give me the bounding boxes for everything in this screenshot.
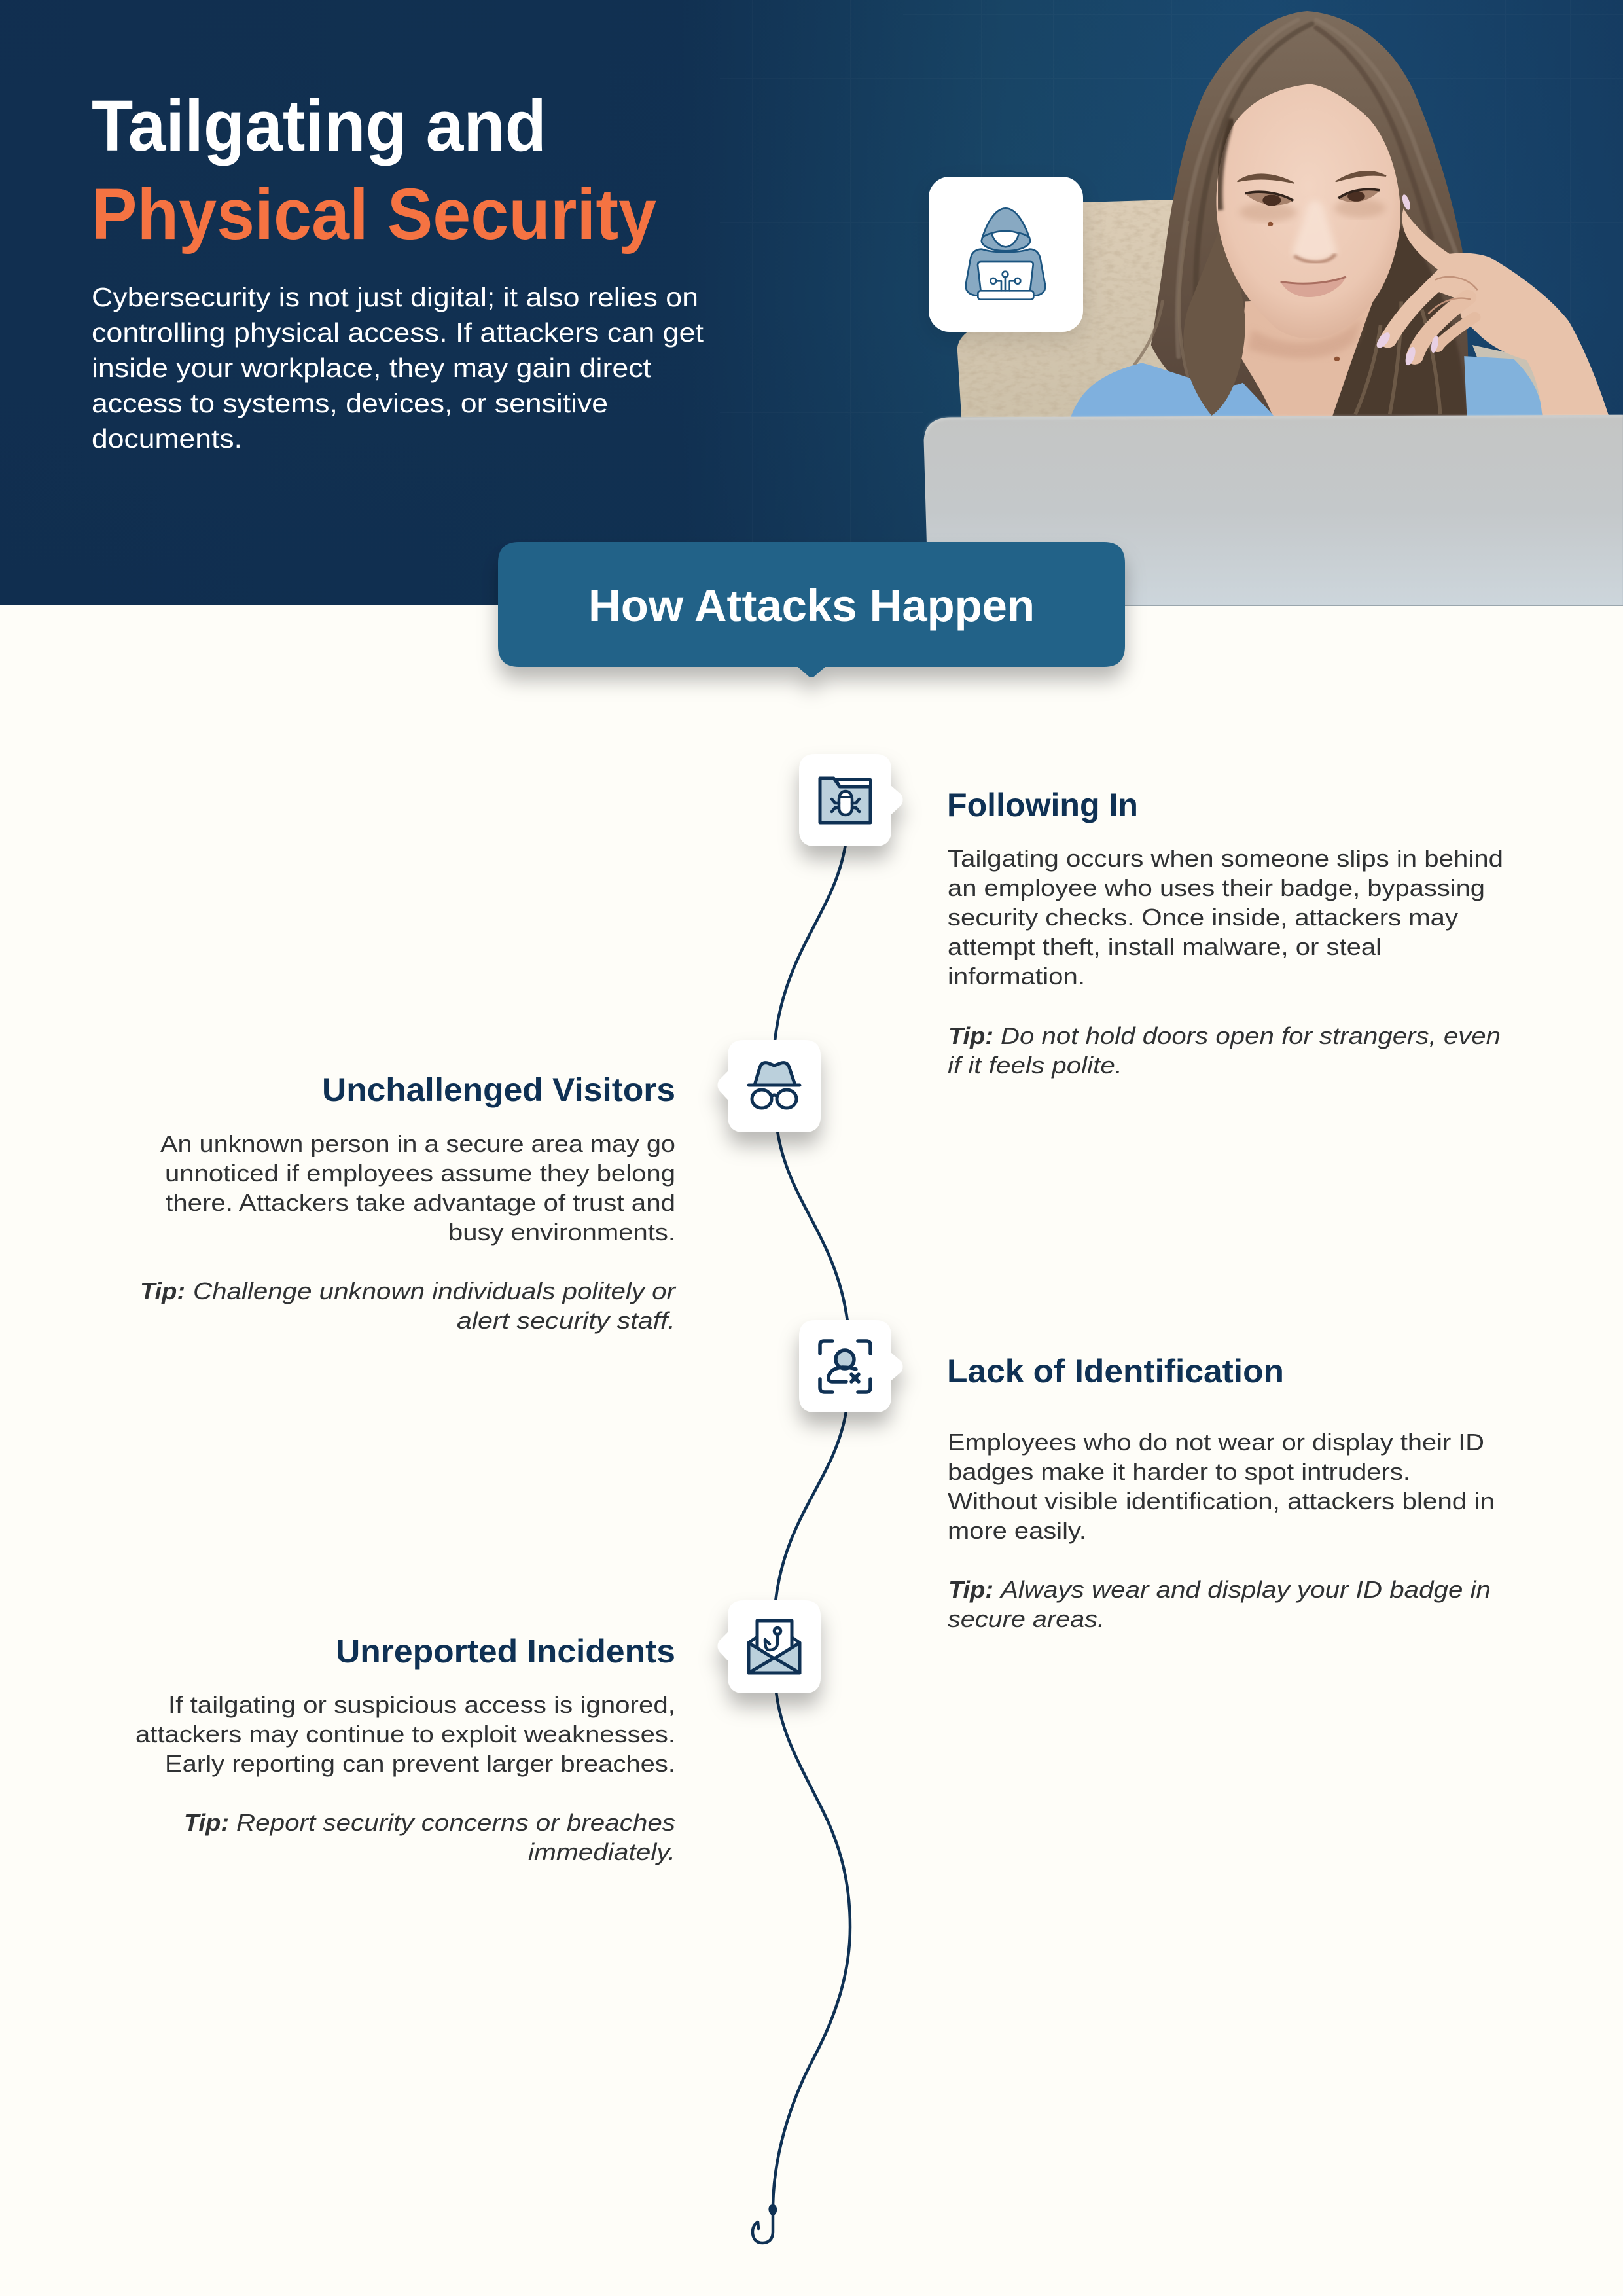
tip: Lack of Identification: secure areas. (948, 1605, 1105, 1632)
step 4 icon card: phishing envelope (717, 1600, 821, 1693)
tip: Unchallenged Visitors: Tip: (140, 1278, 185, 1304)
neck and chest (1241, 293, 1376, 416)
tip: Unchallenged Visitors: Challenge unknown individuals politely or (193, 1278, 677, 1304)
body: Lack of Identification: Employees who do not wear or display their ID (948, 1429, 1484, 1456)
hairline shadow (1219, 119, 1232, 210)
step 3 text (947, 1353, 1495, 1632)
tip: Unreported Incidents: immediately. (528, 1839, 675, 1865)
body: Unreported Incidents: attackers may continue to exploit weaknesses. (135, 1721, 675, 1748)
heading: Unchallenged Visitors: Unchallenged Visitors (322, 1071, 675, 1108)
body: Unchallenged Visitors: there. Attackers take advantage of trust and (166, 1189, 675, 1216)
body: Unchallenged Visitors (160, 1130, 675, 1246)
step 1 text (947, 787, 1503, 1079)
front left hair lock (1183, 222, 1245, 416)
intro paragraph: access to systems, devices, or sensitive (92, 388, 608, 418)
intro paragraph: inside your workplace, they may gain direct (92, 353, 652, 383)
body: Lack of Identification: more easily. (948, 1517, 1086, 1544)
right under-eye shadow (1334, 199, 1385, 218)
hair dark mass right of neck (1332, 214, 1467, 416)
hair back (1151, 11, 1469, 416)
hair strands (1135, 20, 1456, 397)
intro paragraph: controlling physical access. If attackers can get (92, 317, 704, 348)
tip: Unreported Incidents: Tip: (184, 1809, 229, 1836)
right eyebrow (1336, 171, 1386, 182)
nails (1374, 194, 1440, 367)
step 2 text (140, 1071, 677, 1334)
intro paragraph: Cybersecurity is not just digital; it also relies on (92, 282, 698, 312)
main title: Physical Security (92, 174, 656, 255)
hand and forearm (1402, 208, 1609, 416)
heading: Lack of Identification: Lack of Identification (947, 1353, 1284, 1390)
step 3 icon card: identity scan (799, 1320, 903, 1412)
tip: Following In: if it feels polite. (948, 1052, 1122, 1079)
lips (1281, 277, 1346, 297)
body: Unreported Incidents: If tailgating or suspicious access is ignored, (168, 1691, 675, 1718)
step 1 icon card: folder with bug (799, 754, 903, 846)
face (1216, 84, 1400, 338)
left iris (1262, 194, 1281, 206)
right upper lid (1338, 189, 1380, 198)
main title: Tailgating and (92, 86, 546, 166)
body: Unreported Incidents (135, 1691, 675, 1777)
tip: Unreported Incidents: Report security concerns or breaches (236, 1809, 675, 1836)
body: Unchallenged Visitors: busy environments. (448, 1219, 675, 1246)
tip: Following In (948, 1022, 1501, 1079)
strands over dark mass (1355, 301, 1440, 414)
body: Lack of Identification: badges make it harder to spot intruders. (948, 1458, 1410, 1485)
tip: Following In: Do not hold doors open for strangers, even (1001, 1022, 1501, 1049)
section banner: How Attacks Happen (498, 542, 1125, 677)
body: Following In: security checks. Once inside, attackers may (948, 904, 1458, 931)
main title (92, 86, 656, 255)
intro paragraph: documents. (92, 423, 242, 454)
neck shadow (1247, 317, 1363, 359)
right eye (1338, 189, 1380, 202)
icon: hooded hacker with laptop (966, 208, 1045, 300)
body: Unchallenged Visitors: An unknown person in a secure area may go (160, 1130, 675, 1157)
step 4 text (135, 1633, 675, 1865)
left under-eye shadow (1240, 203, 1296, 222)
body: Following In: attempt theft, install malware, or steal (948, 933, 1382, 960)
shirt left (1071, 363, 1275, 417)
heading: Following In: Following In (947, 787, 1138, 823)
laptop bright top rim (926, 416, 1623, 434)
body: Following In: Tailgating occurs when someone slips in behind (948, 845, 1503, 872)
header background (0, 0, 1623, 605)
fingers (1388, 274, 1477, 357)
body: Lack of Identification (948, 1429, 1495, 1544)
icon: person in scan frame with x (820, 1341, 870, 1392)
icon: hat and glasses (749, 1063, 800, 1108)
tip: Following In: Tip: (948, 1022, 993, 1049)
body: Following In (948, 845, 1503, 990)
icon: fish hook at end of line (753, 2204, 777, 2243)
timeline curve (773, 844, 850, 2206)
nose highlight (1293, 200, 1337, 261)
tip: Lack of Identification (948, 1576, 1491, 1632)
body: Following In: an employee who uses their badge, bypassing (948, 874, 1485, 901)
chair sliver right of arm (1472, 345, 1544, 417)
body: Unchallenged Visitors: unnoticed if employees assume they belong (165, 1160, 675, 1187)
body: Following In: information. (948, 963, 1085, 990)
chair (957, 200, 1197, 417)
left eye (1245, 192, 1293, 205)
tip: Unreported Incidents (184, 1809, 675, 1865)
body: Lack of Identification: Without visible identification, attackers blend in (948, 1488, 1495, 1515)
nose underside (1294, 254, 1336, 262)
left eyebrow (1238, 174, 1294, 183)
chair texture (959, 200, 1172, 416)
shirt right (1464, 356, 1542, 417)
icon: folder with bug (820, 778, 870, 823)
left upper lid (1245, 192, 1293, 201)
section banner: How Attacks Happen: How Attacks Happen (588, 581, 1035, 631)
icon: envelope with hook (749, 1621, 800, 1673)
hacker icon card (929, 177, 1083, 332)
heading: Unreported Incidents: Unreported Incidents (336, 1633, 675, 1670)
step 2 icon card: incognito hat and glasses (717, 1040, 821, 1132)
moles (1270, 224, 1337, 359)
laptop back (924, 415, 1623, 605)
intro paragraph (92, 282, 704, 454)
header bottom rule under laptop (1125, 605, 1623, 606)
lip line (1281, 277, 1346, 283)
photo: woman behind laptop (924, 11, 1623, 605)
right iris (1347, 191, 1365, 202)
tip: Lack of Identification: Tip: (948, 1576, 993, 1603)
tip: Unchallenged Visitors: alert security staff. (457, 1307, 675, 1334)
tip: Lack of Identification: Always wear and display your ID badge in (999, 1576, 1491, 1603)
body: Unreported Incidents: Early reporting can prevent larger breaches. (165, 1750, 675, 1777)
tip: Unchallenged Visitors (140, 1278, 677, 1334)
